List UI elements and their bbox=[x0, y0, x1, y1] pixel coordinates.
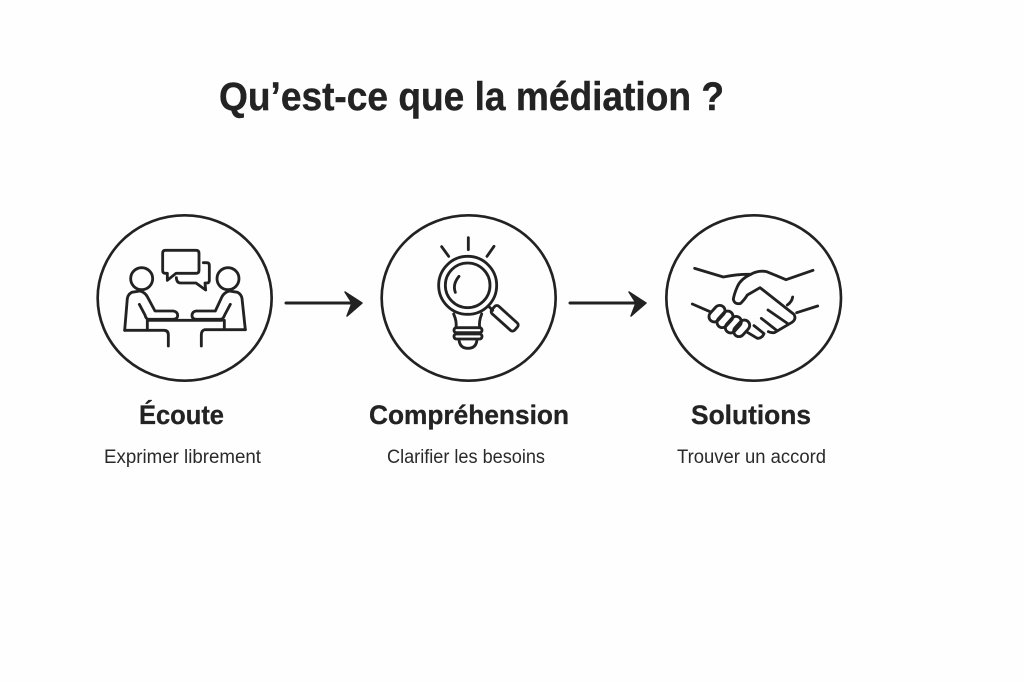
step 2: Compréhension bbox=[369, 215, 569, 468]
icon: two people talking at a table bbox=[98, 215, 272, 381]
step 3: Solutions bbox=[666, 215, 841, 468]
heading: Compréhension bbox=[369, 400, 569, 430]
title: Qu’est-ce que la médiation ? bbox=[219, 75, 724, 119]
caption: Trouver un accord bbox=[677, 447, 826, 468]
step 1: Écoute bbox=[98, 215, 272, 468]
icon: handshake bbox=[666, 215, 841, 381]
caption: Exprimer librement bbox=[104, 447, 262, 468]
icon: light bulb with magnifying glass bbox=[382, 215, 556, 381]
arrow 2 bbox=[570, 292, 646, 316]
heading: Écoute bbox=[139, 399, 224, 430]
arrow 1 bbox=[286, 292, 362, 316]
heading: Solutions bbox=[691, 400, 811, 430]
caption: Clarifier les besoins bbox=[387, 447, 545, 468]
